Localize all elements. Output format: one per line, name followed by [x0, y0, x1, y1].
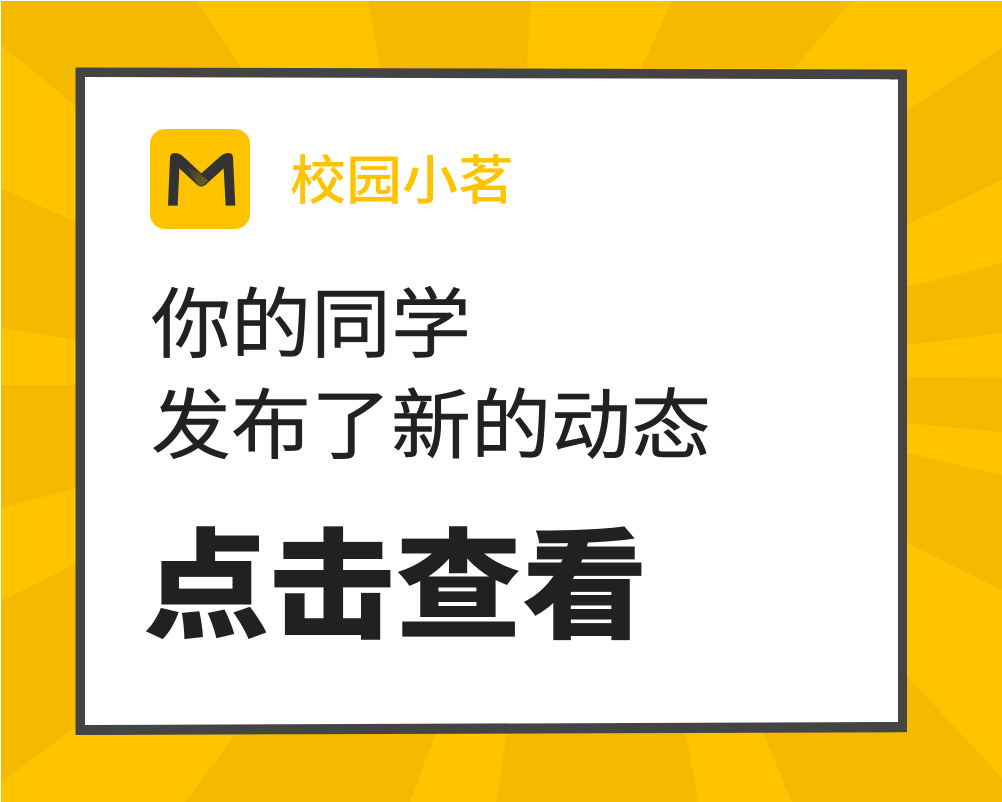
card frame — [76, 68, 907, 735]
brand name: 校园小茗 — [290, 151, 514, 210]
call to action: 点击查看 — [143, 521, 648, 653]
headline line 2: 发布了新的动态 — [151, 383, 711, 469]
headline line 1: 你的同学 — [151, 282, 471, 368]
icon: M logo — [150, 129, 250, 229]
